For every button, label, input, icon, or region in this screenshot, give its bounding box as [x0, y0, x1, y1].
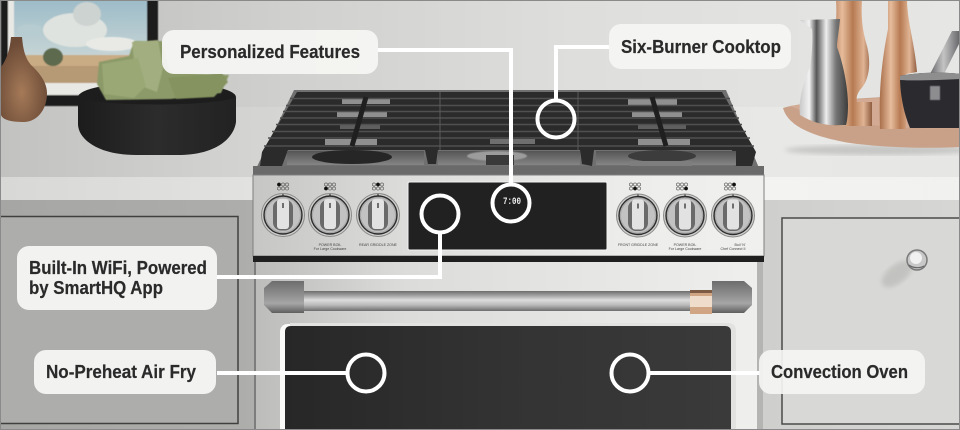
burner indicator dots — [277, 183, 736, 190]
marker: six-burner cooktop — [538, 100, 574, 138]
burner: right — [628, 150, 696, 166]
grate lines — [264, 92, 754, 150]
copper accent — [690, 290, 712, 314]
knob captions — [314, 243, 746, 251]
knob captions: POWER BOIL — [319, 243, 341, 247]
copper tray — [783, 95, 960, 148]
knob captions: For Large Cookware — [669, 247, 701, 251]
knob captions: FRONT GRIDDLE ZONE — [618, 243, 659, 247]
grate: dark cast iron — [260, 92, 756, 166]
knob captions: REAR GRIDDLE ZONE — [359, 243, 398, 247]
callout: built-in wifi — [17, 246, 217, 310]
dark separator strip — [253, 256, 764, 262]
artwork: framed landscape — [1, 0, 158, 106]
oven door — [254, 262, 763, 430]
tray shadow — [785, 145, 960, 155]
knobs — [262, 194, 754, 237]
range — [253, 90, 764, 430]
pestle — [928, 31, 959, 80]
burner wells — [287, 151, 424, 165]
connector: convection oven — [649, 371, 760, 375]
countertop front edge — [0, 177, 960, 200]
right cabinet door — [782, 218, 960, 424]
countertop surface — [0, 107, 960, 178]
black bowl body — [78, 97, 236, 155]
callout: built-in wifi: Built-In WiFi, Powered — [29, 258, 207, 278]
window frame top and right — [290, 323, 736, 430]
control panel — [253, 175, 764, 262]
callout: no-preheat air fry — [34, 350, 216, 394]
brown ceramic vase — [1, 37, 47, 122]
callout: personalized features — [162, 30, 378, 74]
wall — [0, 0, 960, 108]
bowl with artichokes — [78, 40, 236, 155]
burner: left — [312, 150, 392, 164]
marker: no-preheat air fry — [348, 354, 384, 392]
cooktop — [253, 90, 764, 175]
connector: built-in wifi — [217, 233, 440, 277]
cabinet knob — [907, 250, 927, 270]
callout: six-burner cooktop: Six-Burner Cooktop — [621, 37, 781, 57]
grate cross bars — [352, 97, 666, 146]
cooktop surface and back rail — [253, 90, 762, 175]
callout: six-burner cooktop — [609, 24, 791, 69]
callout: personalized features: Personalized Features — [180, 42, 360, 62]
display — [408, 182, 607, 250]
marker: personalized features — [492, 184, 530, 222]
callout: convection oven — [759, 350, 925, 394]
connector: personalized features — [378, 50, 511, 184]
connector: six-burner cooktop — [556, 47, 609, 100]
knob captions: Boil 'N' — [735, 243, 746, 247]
artichokes — [97, 40, 229, 100]
back-edge strip — [253, 166, 764, 175]
left cabinet door — [0, 216, 238, 424]
knob captions: Chef Connect II — [721, 247, 745, 251]
knob captions: For Large Cookware — [314, 247, 346, 251]
clock reading: 7:00 — [503, 197, 521, 208]
cabinet face — [0, 200, 960, 430]
knob captions: POWER BOIL — [674, 243, 696, 247]
oven window — [285, 326, 731, 430]
tray with copper and silver decor — [783, 0, 960, 155]
grate slots — [325, 99, 690, 145]
callout: convection oven: Convection Oven — [771, 362, 908, 382]
silver carafe — [800, 19, 848, 125]
cabinet knob shadow — [877, 256, 917, 292]
copper bottle — [880, 0, 917, 129]
burner: centre — [467, 151, 527, 165]
copper vessel — [829, 0, 872, 126]
callout: built-in wifi: by SmartHQ App — [29, 278, 163, 298]
black mortar — [900, 73, 960, 128]
connector: no-preheat air fry — [217, 371, 348, 375]
handle — [264, 281, 752, 314]
callout: no-preheat air fry: No-Preheat Air Fry — [46, 362, 196, 382]
marker: built-in wifi — [422, 196, 458, 232]
black bowl rim — [78, 82, 236, 112]
window frame left edge — [280, 324, 294, 430]
marker: convection oven — [612, 354, 648, 392]
